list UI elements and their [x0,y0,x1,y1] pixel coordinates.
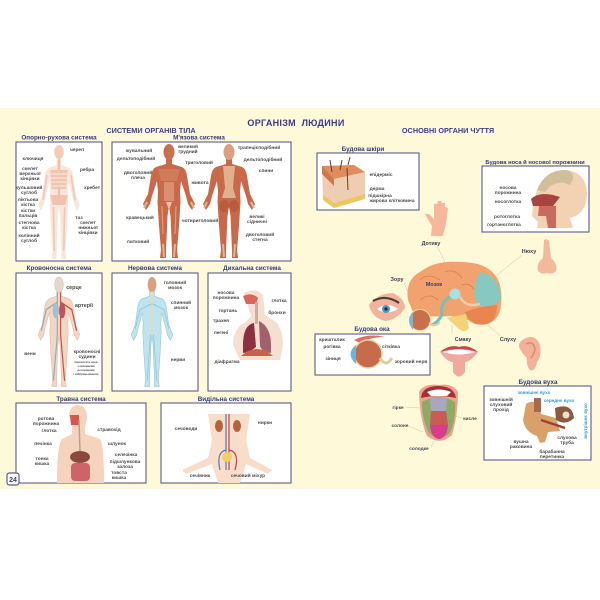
panel: skin structure: Будова шкіри [342,145,384,153]
respiratory labels [213,291,287,365]
eye labels: зіниця [325,356,341,362]
nose labels: носоглотка [495,200,522,205]
respiratory labels: бронхи [268,309,286,316]
skin labels [368,172,415,204]
muscle labels: двоголовий [246,231,274,238]
respiratory labels: носова [218,291,235,296]
icon: nose [538,239,556,274]
circulatory labels: речовинами [78,368,95,372]
nose labels: ротоглотка [494,215,520,220]
ear labels: прохід [493,407,509,413]
digestive labels: ротова [38,417,55,422]
taste labels: гірке [392,405,404,411]
panel: musculoskeletal system: Опорно-рухова система [21,134,97,142]
skin labels: жирова клітковина [368,198,415,204]
nervous labels: мозок [174,306,189,311]
muscle labels: трапецієподібний [238,144,280,151]
eye labels: рогівка [323,344,341,350]
skin labels: епідерміс [369,172,393,178]
ear labels: слуховий [490,401,512,408]
muscle labels: литковий [127,238,149,245]
digestive labels: підшлункова [110,459,141,465]
panel: ear structure: Будова вуха [519,379,558,386]
muscle labels: великі [249,214,265,220]
nervous labels [164,279,191,363]
sense labels: Слуху [500,337,516,343]
nose labels: порожнина [495,191,522,196]
panel: circulatory system [16,265,102,391]
nervous labels: нерви [171,358,185,363]
eye labels: сітківка [382,344,400,350]
excretory labels: сечовий міхур [231,472,265,479]
respiratory labels: діафрагма [214,358,240,365]
head cross-section illustration [531,170,587,228]
digestive labels: кишка [112,476,127,481]
panel: respiratory system: Дихальна система [223,265,281,272]
ear labels [489,396,577,460]
icon: eyeball small [409,310,440,330]
taste labels: солоне [392,424,409,429]
nose labels: гортаноглотка [487,223,521,228]
skeleton labels: суглоб [21,189,37,196]
circulatory labels: серце [66,285,82,291]
digestive labels: шлунок [108,442,127,447]
sense labels: Зору [391,277,403,283]
skeleton labels: кінцівки [78,230,98,236]
skeleton labels: череп [70,148,84,153]
digestive labels [33,417,141,481]
muscle figure: back [203,144,255,258]
icon: tongue taste zones [419,385,458,441]
circulatory labels: вени [24,352,36,357]
taste labels: солодке [409,447,429,452]
eye labels: зоровий нерв [395,358,427,365]
page number badge: 24 [9,477,17,484]
nose labels [487,186,522,228]
ear cross-section illustration [523,398,574,443]
lungs illustration [233,290,283,360]
heading: sense organs: ОСНОВНІ ОРГАНИ ЧУТТЯ [402,126,494,135]
circulatory labels: судини [78,355,96,360]
muscle labels: спини [259,169,273,174]
circulatory labels: кровоносні [74,349,100,355]
digestive labels: селезінка [115,452,138,458]
page background [0,108,600,489]
circulatory labels: з кисневими [77,364,95,368]
muscle labels: жувальний [125,147,152,154]
sense labels: Нюху [522,249,536,255]
circulatory labels: і вібпрацьованою [74,372,99,376]
respiratory labels: гортань [219,309,237,314]
sense labels: Мозок [426,282,442,288]
ear zone labels: середнє вухо [544,398,574,403]
ear labels: слухова [557,436,577,441]
ear labels: труба [560,439,574,446]
digestive labels: тонка [35,457,49,462]
sense labels: Дотику [422,241,440,247]
digestive labels: залоза [117,465,133,470]
ear labels: перетинка [540,455,565,460]
ear zone labels [518,390,588,439]
page number badge [7,473,19,485]
muscle labels: великий [178,143,198,150]
panel: nervous system: Нервова система [128,265,183,272]
respiratory labels: порожнина [213,296,240,301]
skeleton labels: колінний [18,232,40,239]
nervous labels: головний [164,279,186,286]
panel: nose structure: Будова носа й носової порожнини [485,159,585,166]
digestive labels: стравохід [97,427,121,433]
title: ОРГАНІЗМ ЛЮДИНИ [247,118,345,128]
panel: muscular system: М'язова система [173,134,225,142]
panel: respiratory system [208,265,291,391]
panel: nervous system [112,265,198,391]
skeleton labels: таз [75,216,83,221]
taste labels: кисле [463,417,477,422]
excretory labels [175,421,272,479]
panel: excretory system: Видільна система [198,395,255,403]
skeleton labels: хребет [84,184,101,191]
excretory labels: сечівник [190,473,211,479]
connector lines [404,246,522,447]
muscle labels: грудний [178,148,198,155]
circulatory labels: артерії [75,303,94,309]
nervous figure [131,277,173,386]
skeleton labels: ключиця [23,157,44,162]
ear labels: вушна [513,440,529,445]
skeleton labels: верхньої [19,171,41,177]
skeleton labels: кінцівки [20,176,40,182]
muscle labels: дельтоподібний [117,155,155,162]
digestive labels: глотка [41,429,57,434]
panel: ear structure [484,379,591,460]
circulatory labels [24,285,100,376]
ear labels: зовнішній [489,396,513,403]
panel: eye structure [315,326,430,375]
sense labels [391,241,536,343]
nervous labels: спинний [171,299,191,306]
muscle labels: триголовий [185,159,213,166]
skeleton labels: кістки [21,208,35,214]
sense labels: Смаку [455,337,471,343]
skeleton labels [16,148,101,244]
circulatory labels: переносять кров [74,360,98,364]
nervous labels: мозок [168,286,183,291]
panel: digestive system [16,396,146,483]
muscle labels: стегна [252,238,268,243]
icon: hand [425,201,448,236]
skeleton labels: нижньої [78,225,98,231]
icon: mouth [440,346,478,376]
ear zone labels: внутрішнє вухо [583,403,588,439]
excretory illustration [182,414,272,483]
panel: eye structure: Будова ока [354,326,390,333]
skeleton labels: кістка [22,225,36,231]
digestive illustration [57,405,104,483]
muscle labels: плеча [131,176,145,181]
respiratory labels: легені [214,330,228,336]
muscle labels: чотириголовий [182,217,218,224]
skeleton labels: ліктьова [18,197,39,203]
panel: nose structure [482,159,589,232]
icon: brain [408,262,501,331]
skeleton labels: стегнова [18,221,40,226]
skeleton labels: суглоб [21,237,37,244]
digestive labels: печінка [34,441,52,447]
muscle labels [117,143,282,245]
skeleton labels: кістка [21,202,35,208]
ear labels: раковина [510,445,532,450]
muscle labels: живота [190,181,209,186]
skeleton labels: скелет [80,221,96,226]
eye labels: кришталик [319,338,345,343]
muscle labels: дельтоподібний [244,156,282,163]
skeleton labels: пальців [19,213,37,219]
panel: circulatory system: Кровоносна система [27,265,92,272]
taste labels [392,405,477,452]
panel: digestive system: Травна система [56,396,106,403]
panel: excretory system [161,395,291,483]
digestive labels: кишка [35,462,50,467]
digestive labels: порожнина [33,422,60,427]
skin labels: підшкірна [368,193,392,199]
skeleton labels: ребра [80,166,94,173]
muscle labels: сідничні [247,219,267,225]
icon: ear [519,337,541,370]
circulatory figure [38,277,80,386]
muscle figure: front [143,144,195,258]
digestive labels: товста [111,471,127,476]
excretory labels: сечоводи [175,427,197,432]
skin labels: дерма [370,187,385,192]
heading: organ systems: СИСТЕМИ ОРГАНІВ ТІЛА [106,126,196,135]
ear zone labels: зовнішнє вухо [518,390,551,395]
skin block illustration [322,157,365,208]
icon: eye [369,293,405,321]
eye labels [319,338,427,365]
skeleton labels: кульшовий [16,184,42,191]
panel: skin structure [317,145,419,210]
skeleton figure [38,145,80,259]
nose labels: носова [500,186,517,191]
eye cross-section illustration [350,336,392,368]
respiratory labels: трахея [213,319,229,324]
muscle labels: двоголовий [124,169,152,176]
excretory labels: нирки [258,421,272,426]
respiratory labels: глотка [271,299,287,304]
panel: muscular system [112,134,291,261]
ear labels: барабанна [539,448,565,455]
panel: musculoskeletal system [16,134,102,261]
skeleton labels: скелет [22,167,38,172]
muscle labels: кравецький [126,214,154,221]
